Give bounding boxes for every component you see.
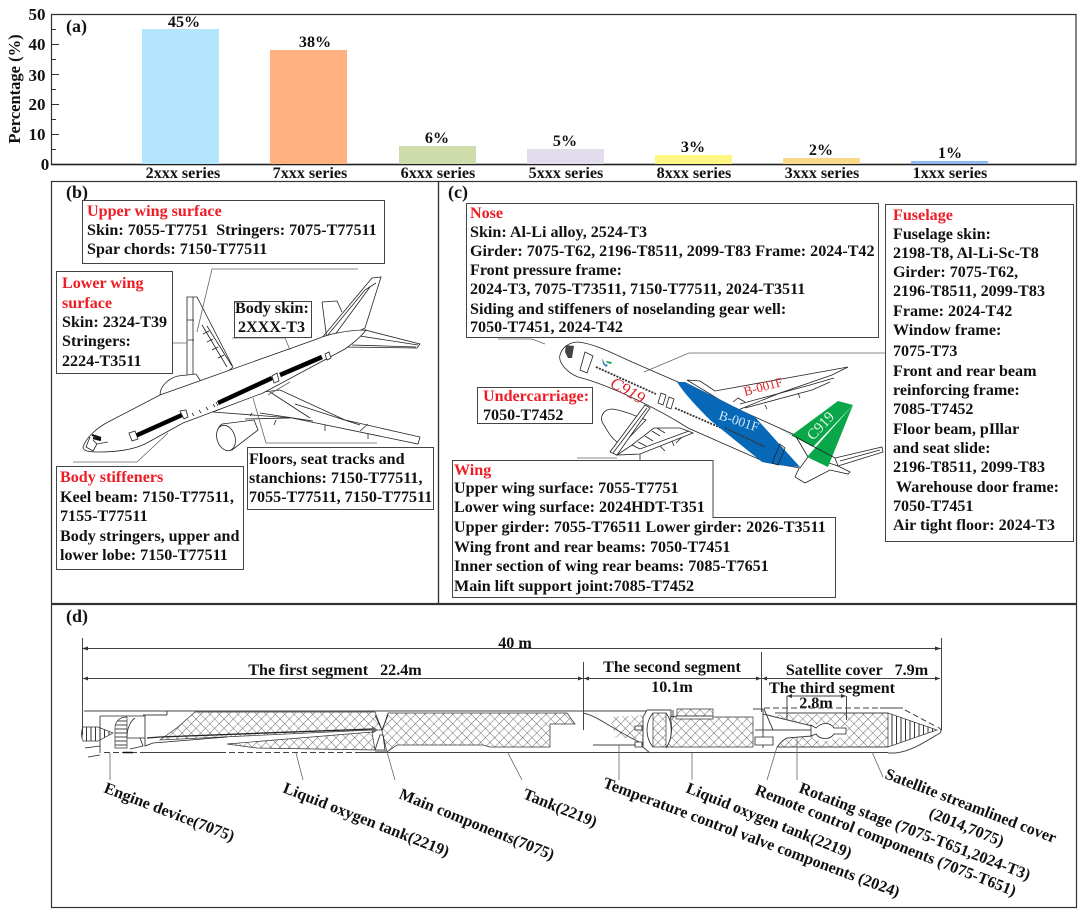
bar: 6xxx series 6%: 6xxx series bbox=[401, 165, 475, 182]
callout: lower wing surface: surface bbox=[62, 295, 112, 312]
callout: wing: Main lift support joint:7085-T7452 bbox=[454, 578, 694, 595]
callout: fuselage: Front and rear beam bbox=[893, 363, 1037, 380]
y axis labels: 30 bbox=[28, 66, 46, 85]
callout: fuselage: Fuselage bbox=[893, 207, 953, 224]
bar: 2xxx series 45%: 2xxx series bbox=[146, 165, 220, 182]
callout: lower wing surface bbox=[56, 272, 172, 374]
panel: (d) launch vehicle alloy applications bbox=[52, 604, 1076, 908]
segment dimensions: The first segment 22.4m bbox=[248, 662, 422, 679]
bar: 3xxx series 2% bbox=[783, 142, 860, 182]
callout: nose: Nose bbox=[470, 205, 503, 222]
bar: 3xxx series 2%: 3xxx series bbox=[785, 165, 859, 182]
segment dimensions bbox=[82, 652, 940, 730]
component label: main components: Main components(7075) bbox=[397, 786, 557, 864]
segment dimensions: 10.1m bbox=[651, 679, 693, 696]
callout: nose: 2024-T3, 7075-T73511, 7150-T77511, 2024-T3511 bbox=[470, 281, 805, 298]
overall dimension: 40 m bbox=[82, 635, 942, 735]
callout: fuselage: Fuselage skin: bbox=[893, 226, 991, 243]
bar: 7xxx series 38%: 7xxx series bbox=[273, 165, 347, 182]
callout: upper wing surface bbox=[82, 200, 384, 264]
callout: fuselage: Girder: 7075-T62, bbox=[893, 264, 1018, 281]
callout: body skin: 2XXX-T3 bbox=[238, 319, 305, 336]
bar: 1xxx series 1%: 1% bbox=[938, 145, 962, 162]
segment dimensions: The third segment bbox=[769, 680, 896, 697]
callout: body stiffeners: Body stiffeners bbox=[60, 469, 163, 486]
component label: satellite streamlined cover: (2014,7075) bbox=[927, 805, 1006, 850]
overall dimension: 40 m: 40 m bbox=[498, 635, 532, 652]
callout: wing: Wing front and rear beams: 7050-T7451 bbox=[454, 539, 730, 556]
chart frame and axis ticks bbox=[51, 14, 1076, 164]
callout: wing: Inner section of wing rear beams: 7085-T7651 bbox=[454, 558, 769, 575]
illustration: C919 airliner: C919 bbox=[804, 409, 838, 444]
bar: 6xxx series 6%: 6% bbox=[425, 130, 449, 147]
leader lines bbox=[498, 339, 885, 458]
callout: lower wing surface: Lower wing bbox=[62, 275, 144, 292]
callout: nose: Girder: 7075-T62, 2196-T8511, 2099-T83 Frame: 2024-T42 bbox=[470, 243, 875, 260]
callout: wing: Wing bbox=[454, 462, 491, 479]
callout: undercarriage: 7050-T7452 bbox=[483, 407, 563, 424]
callout: nose: 7050-T7451, 2024-T42 bbox=[470, 319, 623, 336]
callout: fuselage: Warehouse door frame: bbox=[896, 479, 1059, 496]
callout: body skin bbox=[234, 300, 312, 338]
y axis labels: 10 bbox=[28, 125, 46, 144]
y axis labels: 50 bbox=[28, 5, 46, 24]
callout: wing: Lower wing surface: 2024HDT-T351 bbox=[454, 499, 705, 516]
engine section bbox=[82, 727, 113, 741]
component label: liquid oxygen tank: Liquid oxygen tank(2219) bbox=[281, 780, 452, 861]
callout: fuselage: 2196-T8511, 2099-T83 bbox=[893, 283, 1045, 300]
panel: (a) bar chart of alloy series percentage bbox=[5, 5, 1076, 182]
callout: floors, seat tracks and stanchions: 7055-T77511, 7150-T77511 bbox=[249, 489, 432, 506]
panel label (a): (a) bbox=[66, 16, 87, 37]
panel label (d): (d) bbox=[66, 606, 88, 627]
second segment bbox=[583, 711, 647, 745]
callout: body stiffeners bbox=[56, 466, 244, 570]
leader lines bbox=[73, 269, 377, 462]
callout: nose: Skin: Al-Li alloy, 2524-T3 bbox=[470, 224, 647, 241]
panel: (b) aircraft alloy applications bbox=[52, 182, 438, 604]
callout: nose: Front pressure frame: bbox=[470, 262, 622, 279]
panel label (c): (c) bbox=[448, 182, 468, 203]
callout: body stiffeners: 7155-T77511 bbox=[60, 508, 148, 525]
callout: fuselage: reinforcing frame: bbox=[893, 382, 1020, 399]
segment dimensions: 2.8m bbox=[799, 695, 833, 712]
bar: 1xxx series 1%: 1xxx series bbox=[913, 165, 987, 182]
component label: rotating stage: Rotating stage (7075-T651,2024-T3) bbox=[797, 780, 1033, 884]
callout: fuselage: 2198-T8, Al-Li-Sc-T8 bbox=[893, 245, 1039, 262]
callout: upper wing surface: Upper wing surface bbox=[87, 203, 222, 220]
callout: undercarriage: Undercarriage: bbox=[483, 388, 589, 405]
component label: satellite streamlined cover: Satellite streamlined cover bbox=[883, 766, 1059, 847]
leader lines to components bbox=[110, 737, 883, 780]
callout: undercarriage bbox=[478, 388, 592, 424]
callout: fuselage: Frame: 2024-T42 bbox=[893, 303, 1012, 320]
callout: nose: Siding and stiffeners of noselanding gear well: bbox=[470, 301, 786, 318]
panel frame bbox=[52, 604, 1076, 908]
callout: fuselage: 2196-T8511, 2099-T83 bbox=[893, 459, 1045, 476]
segment dimensions: Satellite cover 7.9m bbox=[786, 662, 929, 679]
component label: liquid oxygen tank, second stage: Liquid oxygen tank(2219) bbox=[684, 780, 854, 862]
y axis labels: 0 bbox=[41, 155, 49, 174]
bar: 3xxx series 2%: 2% bbox=[809, 142, 833, 159]
component label: tank: Tank(2219) bbox=[521, 786, 599, 831]
callout: wing bbox=[452, 460, 836, 598]
callout: wing: Upper girder: 7055-T76511 Lower girder: 2026-T3511 bbox=[454, 519, 826, 536]
bar: 2xxx series 45% bbox=[142, 14, 220, 182]
y axis title: Percentage (%) bbox=[5, 34, 24, 144]
callout: fuselage: and seat slide: bbox=[893, 440, 990, 457]
callout: wing: Upper wing surface: 7055-T7751 bbox=[454, 480, 679, 497]
bar: 5xxx series 5%: 5xxx series bbox=[529, 165, 603, 182]
bar: 1xxx series 1% bbox=[911, 145, 988, 182]
panel: (c) C919 alloy applications bbox=[438, 182, 1076, 604]
callout: lower wing surface: Stringers: bbox=[62, 333, 131, 350]
bar: 7xxx series 38% bbox=[270, 34, 347, 182]
bar: 8xxx series 3%: 3% bbox=[681, 139, 705, 156]
illustration: airliner line drawing bbox=[83, 277, 420, 453]
callout: fuselage: 7075-T73 bbox=[893, 343, 957, 360]
callout: floors, seat tracks and stanchions: stanchions: 7150-T77511, bbox=[249, 470, 422, 487]
panel frame bbox=[438, 182, 1076, 604]
callout: lower wing surface: Skin: 2324-T39 bbox=[62, 314, 167, 331]
illustration: C919 airliner: B-001F bbox=[717, 408, 761, 435]
bar: 2xxx series 45%: 45% bbox=[168, 14, 200, 31]
illustration: C919 airliner: C919 bbox=[607, 373, 649, 408]
callout: floors, seat tracks and stanchions bbox=[248, 448, 434, 510]
bar: 6xxx series 6% bbox=[399, 130, 476, 182]
callout: fuselage: Window frame: bbox=[893, 322, 1001, 339]
callout: fuselage: Floor beam, pIllar bbox=[893, 421, 1019, 438]
segment dimensions: The second segment bbox=[603, 659, 741, 676]
callout: floors, seat tracks and stanchions: Floors, seat tracks and bbox=[249, 451, 405, 468]
panel frame bbox=[52, 182, 438, 604]
illustration: C919 airliner: B-001F bbox=[742, 374, 784, 399]
y axis labels: 20 bbox=[28, 95, 46, 114]
bar: 5xxx series 5% bbox=[527, 133, 604, 182]
component label: remote control components: Remote control components (7075-T651) bbox=[753, 782, 1018, 900]
illustration: launch vehicle cross-section bbox=[82, 708, 941, 757]
panel label (b): (b) bbox=[66, 182, 88, 203]
callout: fuselage: 7085-T7452 bbox=[893, 401, 973, 418]
callout: nose bbox=[466, 204, 878, 338]
first segment tanks bbox=[160, 712, 382, 740]
bar: 7xxx series 38%: 38% bbox=[299, 34, 331, 51]
callout: fuselage bbox=[886, 204, 1074, 542]
third segment and satellite cover bbox=[767, 713, 888, 747]
callout: lower wing surface: 2224-T3511 bbox=[62, 353, 142, 370]
component label: temperature control valve components: Temperature control valve components (2024) bbox=[601, 775, 902, 901]
callout: body stiffeners: lower lobe: 7150-T77511 bbox=[60, 547, 228, 564]
y axis labels bbox=[28, 5, 49, 174]
bar: 5xxx series 5%: 5% bbox=[553, 133, 577, 150]
illustration: C919 airliner bbox=[560, 342, 883, 483]
callout: upper wing surface: Spar chords: 7150-T77511 bbox=[87, 241, 267, 258]
callout: upper wing surface: Skin: 7055-T7751 Stringers: 7075-T77511 bbox=[87, 222, 377, 239]
callout: body stiffeners: Keel beam: 7150-T77511, bbox=[60, 489, 234, 506]
component label: engine device: Engine device(7075) bbox=[102, 780, 237, 845]
callout: body stiffeners: Body stringers, upper and bbox=[60, 528, 240, 545]
callout: fuselage: 7050-T7451 bbox=[893, 498, 973, 515]
bar: 8xxx series 3% bbox=[655, 139, 732, 182]
bar: 8xxx series 3%: 8xxx series bbox=[657, 165, 731, 182]
y axis labels: 40 bbox=[28, 35, 46, 54]
callout: fuselage: Air tight floor: 2024-T3 bbox=[893, 517, 1055, 534]
callout: body skin: Body skin: bbox=[235, 300, 309, 317]
